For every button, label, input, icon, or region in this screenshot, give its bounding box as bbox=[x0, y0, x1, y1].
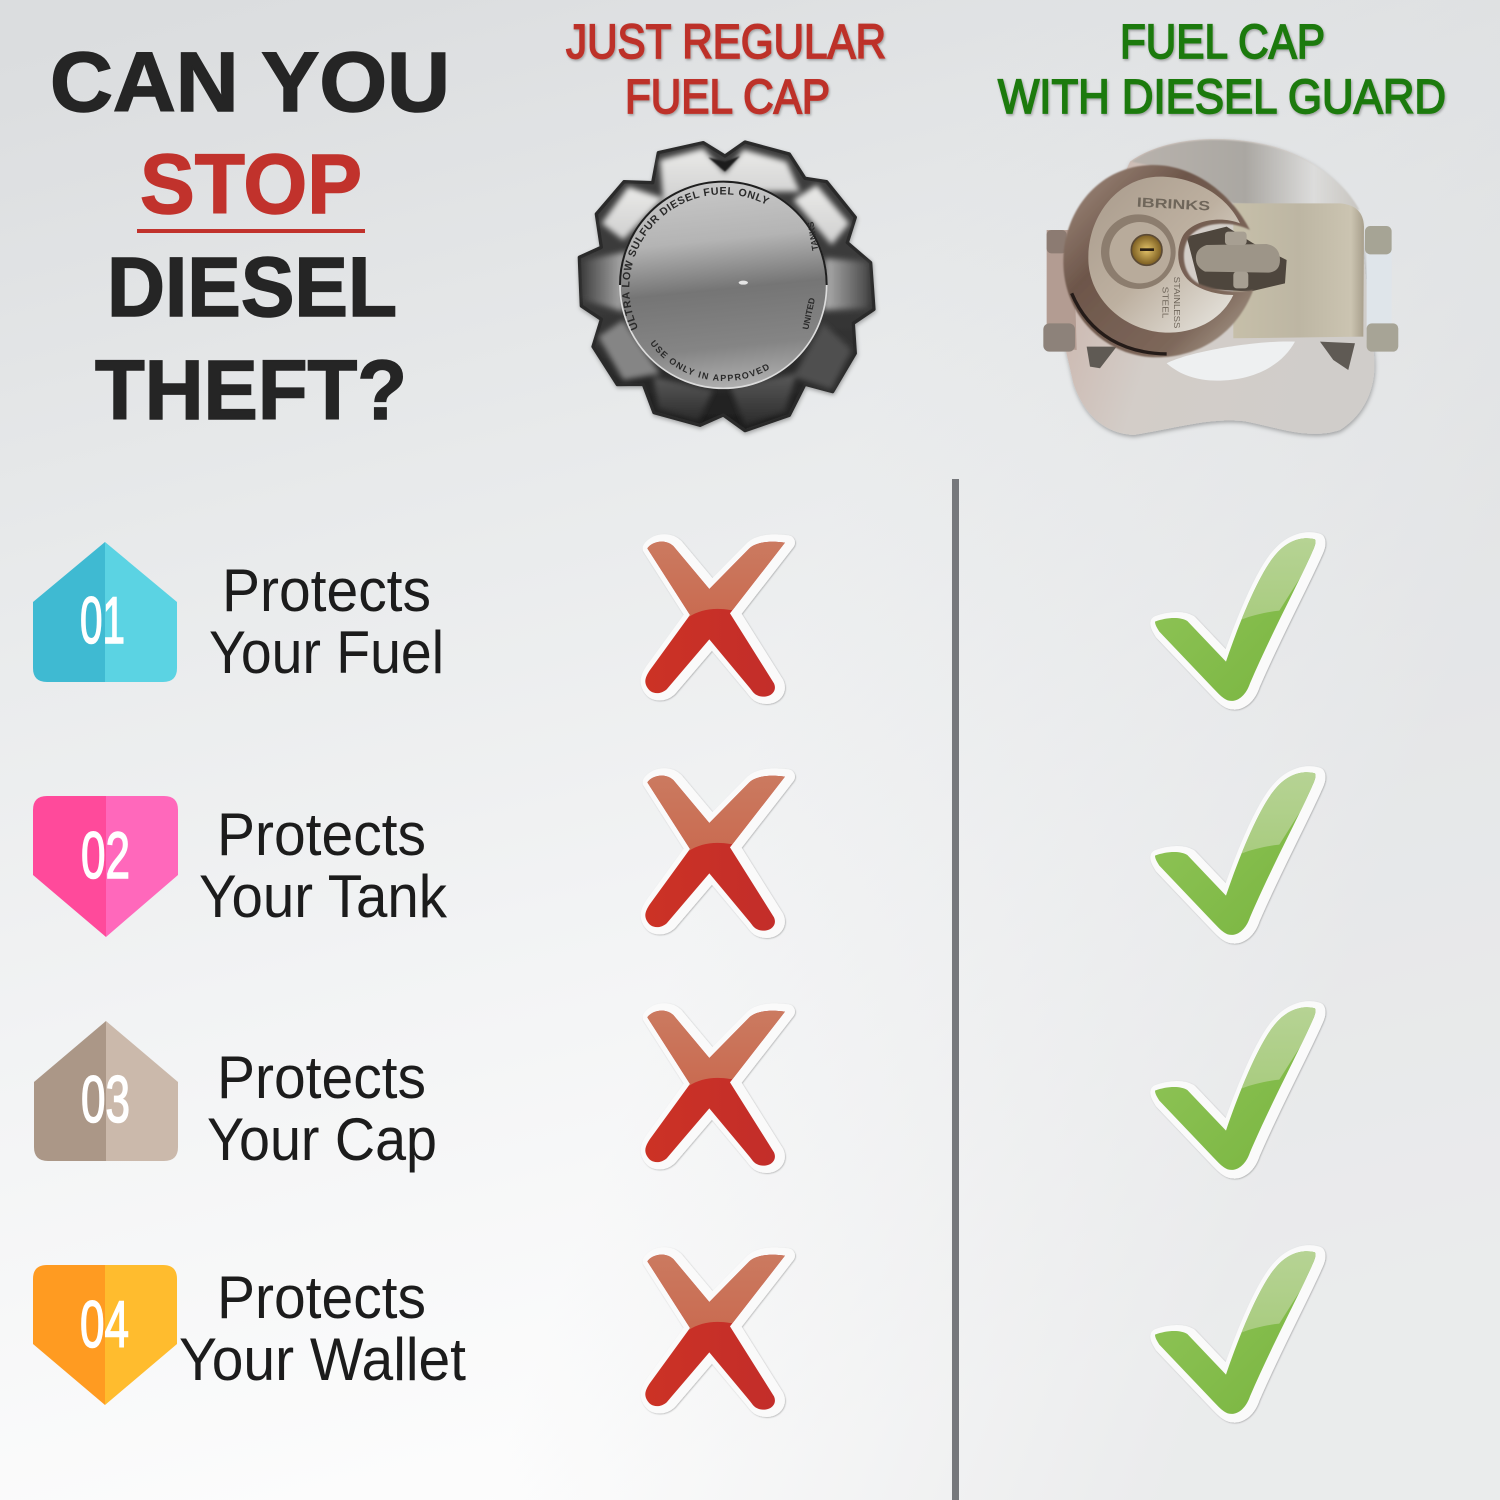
label: Your Wallet bbox=[179, 1326, 466, 1393]
icon: green check bbox=[1155, 772, 1318, 936]
row 3: protects your cap bbox=[34, 1007, 1318, 1173]
icon: red x bbox=[645, 1011, 788, 1166]
row 4: protects your wallet bbox=[33, 1251, 1318, 1415]
heading: fuel cap with diesel guard: FUEL CAP bbox=[1120, 16, 1325, 69]
badge 04 bbox=[33, 1265, 177, 1405]
title word: stop: STOP bbox=[140, 137, 362, 231]
title: can you stop diesel theft: CAN YOU bbox=[50, 35, 450, 129]
label: Your Tank bbox=[199, 863, 448, 930]
lock engraving text: STEEL bbox=[1161, 287, 1170, 319]
label bbox=[179, 1264, 466, 1393]
badge 04: 04 bbox=[80, 1287, 129, 1361]
label: Protects bbox=[217, 801, 426, 868]
right clamp bbox=[1320, 226, 1398, 370]
cap embossed text: USE ONLY IN APPROVED bbox=[651, 340, 769, 382]
row 2: protects your tank bbox=[33, 772, 1318, 937]
title: can you stop diesel theft bbox=[50, 35, 450, 437]
heading: just regular fuel cap bbox=[566, 16, 886, 124]
icon: red x bbox=[645, 542, 788, 697]
disc lock body bbox=[1063, 165, 1253, 357]
heading: just regular fuel cap: JUST REGULAR bbox=[566, 16, 886, 69]
inner disc of the cap bbox=[620, 182, 827, 388]
cap embossed text bbox=[622, 187, 820, 382]
row 1: protects your fuel bbox=[33, 538, 1318, 702]
badge 02 bbox=[33, 796, 178, 937]
heading: just regular fuel cap: FUEL CAP bbox=[625, 71, 830, 124]
cap embossed text: ULTRA LOW SULFUR DIESEL FUEL ONLY bbox=[622, 187, 770, 331]
cap embossed text: UNITED bbox=[800, 297, 817, 330]
icon: red x bbox=[645, 1255, 788, 1410]
left clamp bbox=[1043, 230, 1117, 368]
underline under stop bbox=[137, 229, 365, 233]
icon: green check bbox=[1155, 1007, 1318, 1171]
badge 02: 02 bbox=[81, 818, 130, 892]
heading: fuel cap with diesel guard bbox=[998, 16, 1446, 124]
icon: green check bbox=[1155, 538, 1318, 702]
photo: regular fuel cap bbox=[576, 140, 878, 436]
badge 03: 03 bbox=[81, 1062, 130, 1136]
label bbox=[209, 557, 444, 686]
title: can you stop diesel theft: DIESEL bbox=[107, 240, 397, 334]
shackle recess bbox=[1187, 227, 1287, 292]
title: can you stop diesel theft: THEFT? bbox=[95, 343, 407, 437]
label: Your Fuel bbox=[209, 619, 444, 686]
icon: green check bbox=[1155, 1251, 1318, 1415]
hasp bbox=[1233, 203, 1364, 338]
label: Protects bbox=[217, 1044, 426, 1111]
column divider bbox=[952, 479, 959, 1500]
badge 01: 01 bbox=[80, 583, 125, 657]
guard plate hole bbox=[1167, 341, 1295, 381]
badge 01 bbox=[33, 542, 177, 682]
label: Protects bbox=[222, 557, 431, 624]
key cylinder bbox=[1131, 235, 1162, 265]
shackle bbox=[1196, 244, 1280, 273]
lock engraving text bbox=[1136, 195, 1211, 328]
badge 03 bbox=[34, 1021, 178, 1161]
heading: fuel cap with diesel guard: WITH DIESEL GUARD bbox=[998, 71, 1446, 124]
cap embossed text: TANKS bbox=[805, 221, 820, 251]
label bbox=[207, 1044, 437, 1173]
label: Your Cap bbox=[207, 1106, 437, 1173]
label bbox=[199, 801, 448, 930]
lock engraving text: STAINLESS bbox=[1172, 277, 1181, 328]
guard plate bbox=[1065, 139, 1374, 435]
label: Protects bbox=[217, 1264, 426, 1331]
lock engraving text: IBRINKS bbox=[1136, 195, 1211, 213]
icon: red x bbox=[645, 776, 788, 931]
lock face bbox=[1088, 177, 1240, 333]
photo: fuel cap with diesel guard lock bbox=[1043, 139, 1398, 435]
